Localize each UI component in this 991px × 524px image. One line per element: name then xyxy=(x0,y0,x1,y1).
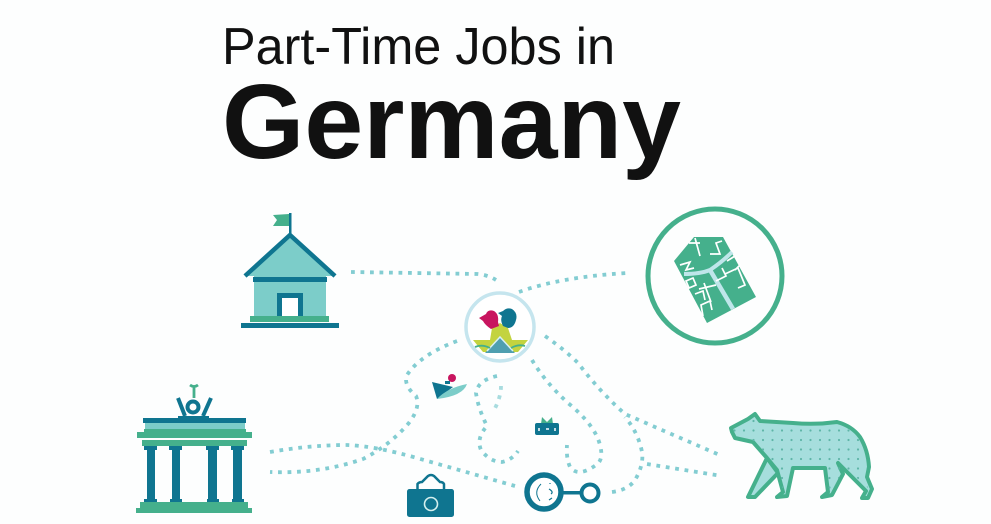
title line: Part-Time Jobs in: Part-Time Jobs in xyxy=(222,18,615,76)
icon: city map in circle xyxy=(648,209,782,343)
title line: Germany: Germany xyxy=(222,63,681,181)
title xyxy=(222,18,681,181)
quadriga sculpture xyxy=(178,385,211,418)
icon: house with flag xyxy=(241,213,339,328)
icon: magnifier connector xyxy=(527,475,598,509)
dotted connector routes xyxy=(270,272,722,492)
icon: bag xyxy=(407,475,454,517)
icon: central emblem xyxy=(466,293,534,361)
icon: small planter xyxy=(535,417,559,435)
icon: Brandenburg Gate xyxy=(136,385,252,513)
icon: bear xyxy=(731,414,872,498)
columns xyxy=(144,446,244,502)
icon: boat xyxy=(432,374,467,399)
